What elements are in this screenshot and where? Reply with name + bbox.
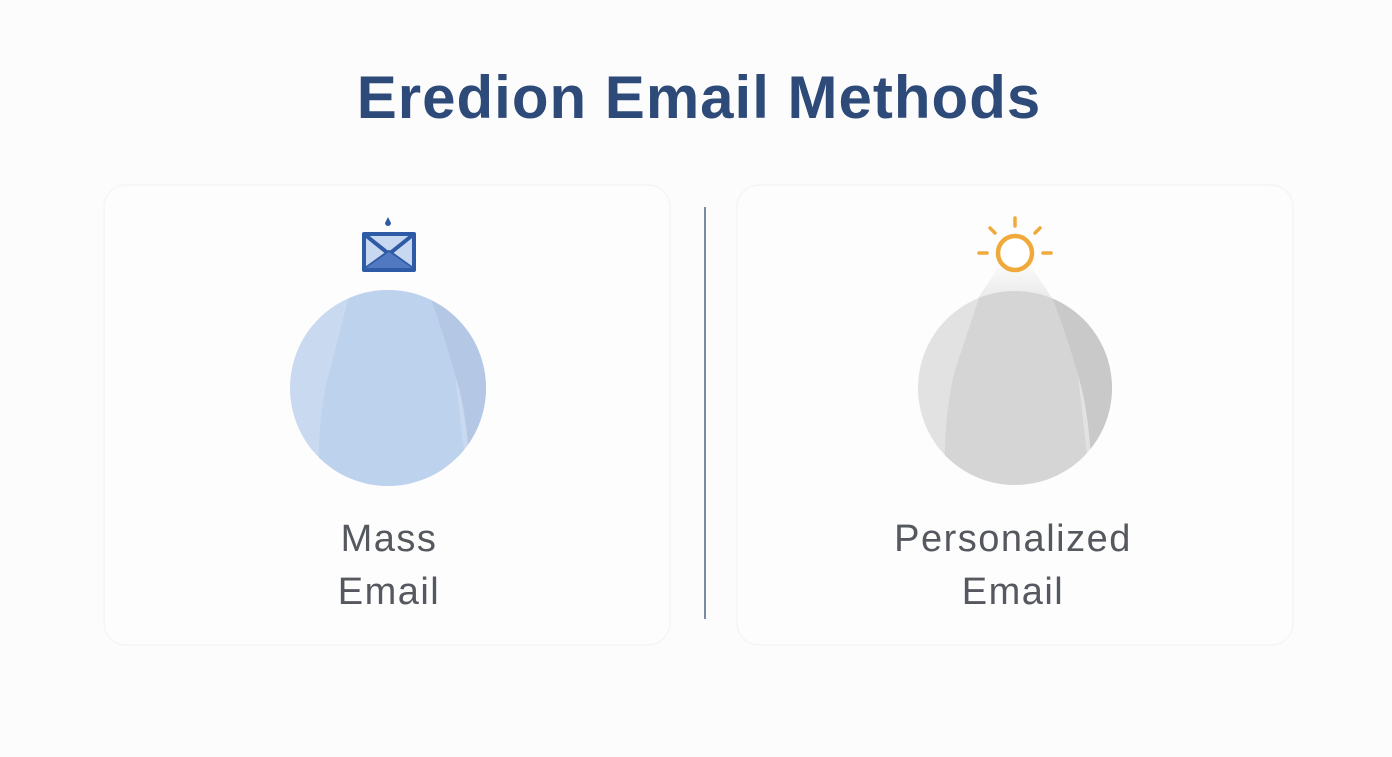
label: personalized email [894,518,1132,613]
label: mass email: Mass [341,518,437,560]
panel: mass email [290,217,486,604]
label: personalized email: Email [962,571,1064,613]
label: mass email [338,518,440,613]
divider [704,207,706,619]
icon: sun [970,218,1060,310]
title: Eredion Email Methods [357,64,1041,131]
icon: envelope [364,217,414,270]
circle: personalized [918,291,1112,485]
circle: mass [290,290,486,486]
panel: personalized email [897,216,1128,604]
label: personalized email: Personalized [894,518,1132,560]
label: mass email: Email [338,571,440,613]
